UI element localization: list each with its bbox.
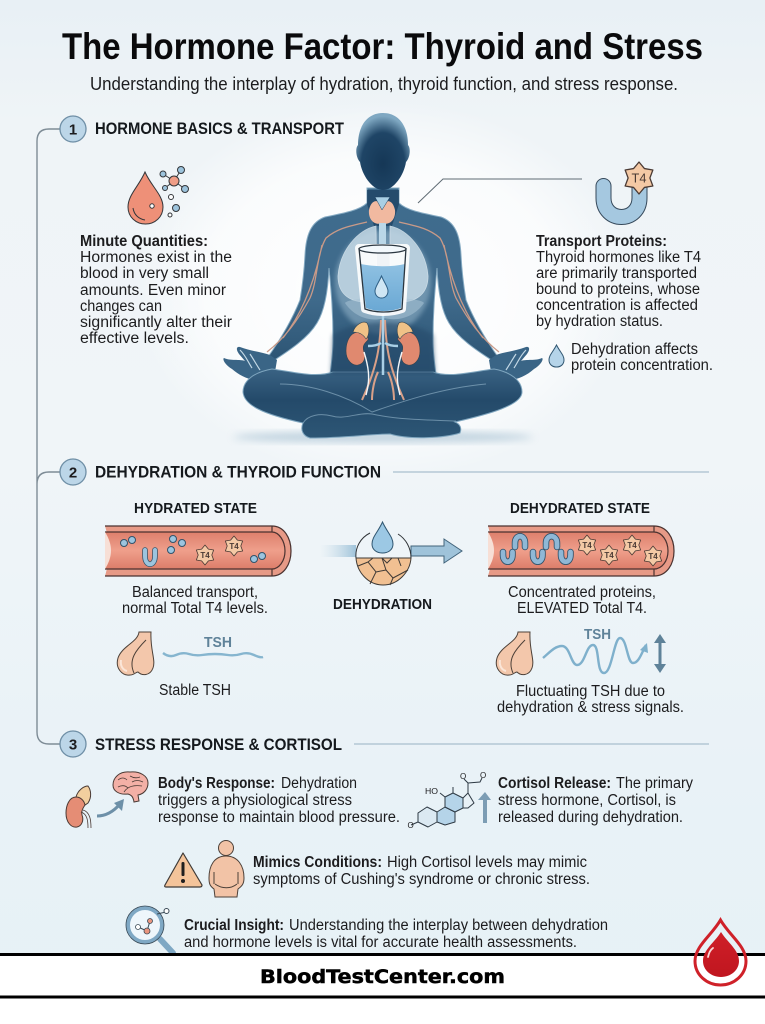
text: transport proteins: [536, 233, 701, 330]
text: minute quantities: [80, 233, 232, 347]
icon: person with weight gain: [209, 840, 244, 897]
caption: fluctuating TSH: [497, 683, 684, 716]
vessel: hydrated: T4: [200, 551, 210, 560]
glass of water: [359, 248, 406, 312]
note: dehydration affects protein concentration: [571, 341, 713, 374]
icon: magnifying glass: [126, 906, 173, 953]
text: mimics conditions: Mimics Conditions:: [253, 854, 382, 871]
section 1 header: HORMONE BASICS & TRANSPORT: [95, 120, 344, 138]
icon: cortisol molecule: O: [480, 771, 486, 780]
neck shading: [367, 190, 399, 226]
fluctuating TSH wave: [543, 638, 648, 673]
lungs: [338, 226, 428, 302]
footer brand name: BloodTestCenter.com: [260, 966, 505, 988]
text: cortisol release: The primary: [616, 775, 693, 792]
text: transport proteins: by hydration status.: [536, 313, 663, 330]
section 3 header: 3: [69, 736, 77, 754]
section 2 header: [60, 459, 709, 485]
icon: double-headed arrow: [654, 634, 666, 673]
blood vessels: [267, 222, 499, 352]
section 1 header: [60, 116, 344, 142]
text: body's response: response to maintain blood pressure.: [158, 809, 400, 826]
text: minute quantities: changes can: [80, 298, 162, 315]
TSH label: TSH: [584, 626, 611, 643]
connector line to transport proteins: [418, 179, 582, 203]
text: transport proteins: Thyroid hormones like T4: [536, 249, 701, 266]
note: dehydration affects protein concentration: protein concentration.: [571, 357, 713, 374]
vessel: dehydrated: T4: [582, 541, 592, 550]
footer band: [0, 953, 765, 1024]
logo: blood drop: [695, 920, 746, 985]
vessel: hydrated: [105, 526, 291, 576]
icon: small water drop: [549, 345, 564, 367]
caption: balanced transport: [122, 584, 268, 617]
title: The Hormone Factor: Thyroid and Stress: [62, 26, 703, 67]
text: transport proteins: are primarily transported: [536, 265, 697, 282]
text: crucial insight: Understanding the interplay between dehydration: [289, 917, 608, 934]
icon: pituitary gland: [117, 632, 154, 675]
stable TSH wave: [163, 653, 263, 657]
TSH label: TSH: [204, 634, 232, 651]
abdomen: [331, 322, 435, 374]
thyroid: [369, 201, 395, 224]
section 2 header: DEHYDRATION & THYROID FUNCTION: [95, 464, 381, 482]
vessel: dehydrated: [488, 526, 674, 576]
text: minute quantities: Minute Quantities:: [80, 233, 208, 250]
figure head: [356, 113, 410, 190]
icon: cortisol molecule: [408, 771, 491, 830]
upper torso lighter shading: [335, 230, 431, 334]
section 1 header: 1: [69, 122, 77, 138]
caption: concentrated proteins: Concentrated proteins,: [508, 584, 656, 601]
icon: cortisol molecule: O: [460, 772, 466, 781]
text: mimics conditions: [253, 854, 590, 888]
text: minute quantities: significantly alter their: [80, 314, 232, 331]
central meditating figure: [223, 113, 543, 443]
text: body's response: triggers a physiological stress: [158, 792, 352, 809]
kidneys: [346, 322, 420, 365]
text: minute quantities: Hormones exist in the: [80, 249, 232, 266]
icon: kidney to brain: [66, 772, 148, 828]
vessel: dehydrated: T4: [604, 551, 614, 560]
icon: cortisol molecule: HO: [425, 786, 438, 796]
icon: transport protein with T4: [604, 162, 653, 217]
vessel: hydrated: T4: [229, 542, 239, 551]
panel: dehydrated state: [488, 501, 684, 716]
hand finger highlights: [240, 350, 526, 370]
caption: concentrated proteins: [508, 584, 656, 617]
caption: balanced transport: normal Total T4 levels.: [122, 600, 268, 617]
left hand: [223, 347, 277, 380]
label: dehydration: DEHYDRATION: [333, 597, 432, 613]
text: minute quantities: effective levels.: [80, 330, 189, 347]
figure body and arms: [268, 188, 498, 374]
icon: blood drop with hormone molecules: [128, 166, 188, 224]
caption: balanced transport: Balanced transport,: [132, 584, 258, 601]
caption: fluctuating TSH: dehydration & stress signals.: [497, 699, 684, 716]
text: cortisol release: Cortisol Release:: [498, 775, 611, 792]
text: crucial insight: [184, 917, 608, 951]
text: cortisol release: [498, 775, 693, 826]
text: minute quantities: amounts. Even minor: [80, 282, 226, 299]
section 3 header: STRESS RESPONSE & CORTISOL: [95, 736, 342, 754]
text: transport proteins: concentration is affected: [536, 297, 698, 314]
section 2 header: 2: [69, 464, 77, 482]
crossed legs: [243, 369, 522, 438]
vessel: dehydrated: T4: [627, 541, 637, 550]
icon: cortisol molecule: O: [408, 821, 414, 830]
subtitle: Understanding the interplay of hydration, thyroid function, and stress response.: [90, 74, 678, 94]
icon: cracked earth circle with drop: [356, 522, 411, 585]
heading: hydrated state: HYDRATED STATE: [134, 501, 257, 517]
text: crucial insight: and hormone levels is vital for accurate health assessments.: [184, 934, 577, 951]
text: mimics conditions: High Cortisol levels may mimic: [387, 854, 587, 871]
section timeline connector: [37, 129, 60, 744]
note: dehydration affects protein concentration: Dehydration affects: [571, 341, 698, 358]
icon: warning triangle: [165, 853, 202, 887]
text: crucial insight: Crucial Insight:: [184, 917, 284, 934]
section 3 header: [60, 731, 709, 757]
heading: dehydrated state: DEHYDRATED STATE: [510, 501, 650, 517]
icon: transport protein with T4: T4: [632, 170, 646, 185]
text: mimics conditions: symptoms of Cushing's syndrome or chronic stress.: [253, 871, 590, 888]
text: body's response: [158, 775, 400, 826]
center: dehydration transition: [320, 522, 462, 613]
text: transport proteins: bound to proteins, whose: [536, 281, 700, 298]
panel: hydrated state: [105, 501, 291, 699]
text: body's response: Body's Response:: [158, 775, 275, 792]
arrow head: [411, 539, 462, 563]
caption: concentrated proteins: ELEVATED Total T4.: [517, 600, 647, 617]
text: body's response: Dehydration: [281, 775, 357, 792]
text: minute quantities: blood in very small: [80, 265, 209, 282]
text: cortisol release: stress hormone, Cortisol, is: [498, 792, 676, 809]
vessel: dehydrated: T4: [648, 552, 658, 561]
icon: pituitary gland under stress: [496, 632, 533, 675]
text: transport proteins: Transport Proteins:: [536, 233, 667, 250]
caption: stable TSH: Stable TSH: [159, 682, 231, 699]
right hand: [489, 347, 543, 380]
text: cortisol release: released during dehydration.: [498, 809, 683, 826]
caption: fluctuating TSH: Fluctuating TSH due to: [516, 683, 665, 700]
arrow tail: [320, 545, 356, 557]
